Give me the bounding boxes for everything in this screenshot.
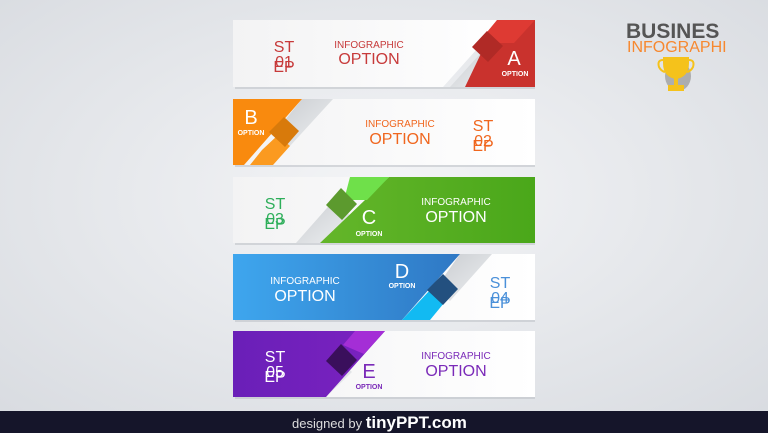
text: infographic option D: INFOGRAPHIC <box>270 276 340 287</box>
text: infographic option A: OPTION <box>338 51 400 68</box>
text: infographic option B: INFOGRAPHIC <box>365 119 435 130</box>
text: infographic option E: INFOGRAPHIC <box>421 351 491 362</box>
letter D: D <box>395 261 409 283</box>
logo: business infographic: INFOGRAPHI <box>627 39 727 56</box>
letter B <box>238 107 264 137</box>
logo: business infographic <box>626 20 727 91</box>
step label 04: 04 <box>491 290 509 307</box>
footer bar: designed by tinyPPT.com <box>292 413 467 432</box>
letter C: OPTION <box>356 231 382 238</box>
step label 01 <box>273 39 295 76</box>
letter E: OPTION <box>356 384 382 391</box>
letter C <box>356 207 382 238</box>
letter A: A <box>507 48 521 70</box>
step label 01: 01 <box>275 54 293 71</box>
panel: step 01 A <box>233 20 535 87</box>
text: infographic option C <box>421 197 491 226</box>
step label 05: ST <box>265 349 285 366</box>
letter D: OPTION <box>389 283 415 290</box>
step label 05: 05 <box>266 364 284 381</box>
footer bar <box>0 411 768 433</box>
letter A <box>502 48 528 78</box>
step label 04: ST <box>490 275 510 292</box>
step label 04 <box>489 275 511 312</box>
text: infographic option A: INFOGRAPHIC <box>334 40 404 51</box>
step label 02: 02 <box>474 133 492 150</box>
panel: step 04 D <box>233 254 535 320</box>
logo: business infographic: BUSINES <box>626 20 719 43</box>
letter B: B <box>244 107 258 129</box>
letter D <box>389 261 415 290</box>
text: infographic option B <box>365 119 435 148</box>
letter B: OPTION <box>238 130 264 137</box>
step label 02: ST <box>473 118 493 135</box>
step label 03 <box>264 196 286 233</box>
letter C: C <box>362 207 376 229</box>
step label 03: ST <box>265 196 285 213</box>
step label 03: EP <box>264 216 286 233</box>
text: infographic option D: OPTION <box>274 288 336 305</box>
icon: trophy <box>658 57 694 91</box>
step label 01: EP <box>273 59 295 76</box>
step label 05 <box>264 349 286 386</box>
text: infographic option E: OPTION <box>425 363 487 380</box>
panel: step 02 B <box>233 99 535 165</box>
text: infographic option A <box>334 40 404 68</box>
letter E <box>356 361 382 391</box>
panel: step 03 C <box>233 177 535 243</box>
step label 05: EP <box>264 369 286 386</box>
text: infographic option C: OPTION <box>425 209 487 226</box>
step label 02: EP <box>472 138 494 155</box>
step label 04: EP <box>489 295 511 312</box>
panel: step 05 E <box>233 331 535 397</box>
step label 02 <box>472 118 494 155</box>
letter E: E <box>362 361 376 383</box>
text: infographic option C: INFOGRAPHIC <box>421 197 491 208</box>
text: infographic option E <box>421 351 491 380</box>
letter A: OPTION <box>502 71 528 78</box>
text: infographic option D <box>270 276 340 305</box>
step label 01: ST <box>274 39 294 56</box>
step label 03: 03 <box>266 211 284 228</box>
text: infographic option B: OPTION <box>369 131 431 148</box>
